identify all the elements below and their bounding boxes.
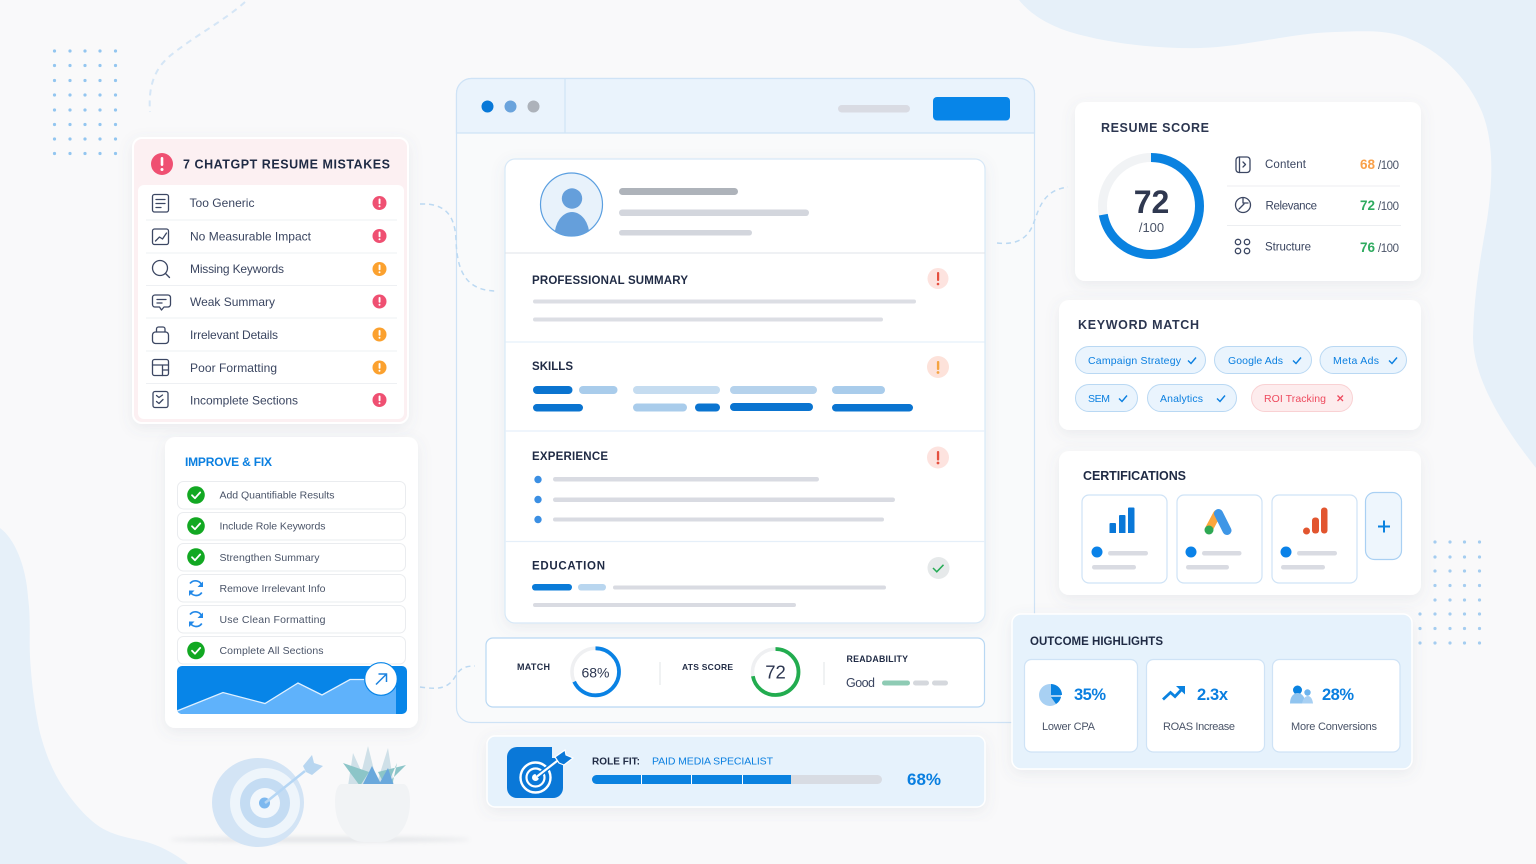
donut: 72/100 bbox=[1102, 158, 1200, 254]
chip: Google Ads: Google Ads bbox=[1228, 355, 1283, 367]
row: Weak Summary bbox=[152, 294, 386, 310]
metric: readability: READABILITY bbox=[846, 654, 908, 664]
metric: ATS score bbox=[682, 649, 798, 695]
row: Missing Keywords: Missing Keywords bbox=[190, 262, 284, 276]
dashed curve: top left bbox=[150, 2, 245, 112]
connector: resume to score panel bbox=[997, 187, 1068, 243]
row: Remove Irrelevant Info: Remove Irrelevant Info bbox=[220, 583, 326, 595]
section: skills: SKILLS bbox=[532, 361, 573, 373]
dot grid: lower right bbox=[1418, 540, 1481, 645]
heading: improve and fix: IMPROVE & FIX bbox=[185, 455, 272, 469]
row: structure bbox=[1235, 239, 1399, 255]
card: ROAS increase bbox=[1146, 660, 1264, 752]
row: Missing Keywords bbox=[152, 260, 386, 278]
chip: Campaign Strategy bbox=[1076, 346, 1206, 374]
panel: role fit: PAID MEDIA SPECIALIST bbox=[652, 756, 774, 768]
chip: Meta Ads: Meta Ads bbox=[1333, 355, 1379, 367]
row: content: /100 bbox=[1378, 160, 1399, 172]
dot grid: top left bbox=[53, 49, 117, 155]
row: relevance: Relevance bbox=[1266, 200, 1317, 212]
card: ROAS increase: 2.3x bbox=[1197, 686, 1229, 704]
panel: outcome highlights bbox=[1012, 614, 1412, 769]
heading: resume score: RESUME SCORE bbox=[1101, 121, 1209, 135]
row: No Measurable Impact bbox=[152, 229, 386, 244]
background blob: top right bbox=[1019, 0, 1536, 468]
chip: Google Ads bbox=[1214, 346, 1312, 374]
panel: match, ATS score, readability bbox=[486, 638, 984, 707]
row: Too Generic: Too Generic bbox=[190, 196, 254, 210]
row: content: 68 bbox=[1360, 157, 1375, 172]
row: Use Clean Formatting bbox=[178, 606, 406, 633]
section: education: EDUCATION bbox=[532, 560, 605, 572]
illustration: potted succulent bbox=[335, 746, 410, 842]
row: Include Role Keywords: Include Role Keywords bbox=[220, 520, 326, 532]
row: Poor Formatting bbox=[152, 360, 386, 376]
panel: certifications bbox=[1059, 451, 1421, 595]
row: Complete All Sections bbox=[178, 636, 406, 664]
metric: match: MATCH bbox=[517, 662, 550, 672]
section: professional summary bbox=[532, 268, 948, 322]
card: more conversions bbox=[1272, 660, 1400, 752]
card: analytics certificate bbox=[1082, 495, 1167, 583]
panel: resume document bbox=[505, 159, 985, 623]
metric: readability: Good bbox=[846, 676, 875, 690]
section: education bbox=[532, 557, 950, 607]
card: ROAS increase: ROAS Increase bbox=[1163, 721, 1235, 733]
browser window bbox=[456, 78, 1034, 722]
chip: Meta Ads bbox=[1320, 346, 1406, 374]
row: structure: /100 bbox=[1378, 243, 1399, 255]
icon: up-right arrow button bbox=[365, 663, 397, 695]
row: Weak Summary: Weak Summary bbox=[190, 295, 275, 309]
card: more conversions: 28% bbox=[1322, 686, 1354, 704]
chip: Analytics: Analytics bbox=[1160, 393, 1203, 405]
icon: target with arrow bbox=[507, 746, 573, 798]
heading: mistakes bbox=[151, 153, 390, 175]
panel: 7 ChatGPT resume mistakes bbox=[133, 138, 408, 423]
button: add certificate bbox=[1366, 492, 1402, 560]
row: Too Generic bbox=[152, 194, 386, 212]
panel: improve and fix bbox=[165, 437, 418, 728]
background blob: bottom left bbox=[0, 528, 188, 864]
row: structure: 76 bbox=[1360, 240, 1375, 255]
illustration: ground shadow bbox=[170, 837, 470, 842]
connector: improve panel to match panel bbox=[420, 666, 475, 688]
row: relevance bbox=[1236, 198, 1399, 213]
card: lower CPA: 35% bbox=[1074, 686, 1106, 704]
section: experience: EXPERIENCE bbox=[532, 451, 608, 463]
metric: match bbox=[517, 648, 619, 695]
row: relevance: /100 bbox=[1378, 201, 1399, 213]
row: Strengthen Summary: Strengthen Summary bbox=[220, 552, 320, 564]
row: Incomplete Sections bbox=[153, 392, 386, 408]
panel: role fit: ROLE FIT: bbox=[592, 756, 640, 768]
row: content bbox=[1236, 157, 1399, 172]
card: more conversions: More Conversions bbox=[1291, 721, 1378, 733]
chip: Campaign Strategy: Campaign Strategy bbox=[1088, 355, 1182, 367]
panel: resume score bbox=[1075, 102, 1421, 281]
chart: area trend bbox=[177, 666, 407, 714]
connector: mistakes panel to resume bbox=[420, 204, 497, 291]
row: Include Role Keywords bbox=[178, 512, 406, 540]
row: Strengthen Summary bbox=[178, 544, 406, 571]
heading: certifications: CERTIFICATIONS bbox=[1083, 469, 1186, 483]
row: Add Quantifiable Results: Add Quantifiable Results bbox=[220, 490, 334, 502]
card: red bars certificate bbox=[1272, 495, 1357, 583]
row: Complete All Sections: Complete All Sections bbox=[220, 645, 324, 657]
chip: ROI Tracking bbox=[1252, 384, 1352, 412]
section: skills bbox=[532, 356, 949, 412]
chip: Analytics bbox=[1148, 384, 1236, 412]
row: Remove Irrelevant Info bbox=[178, 574, 406, 602]
metric: ATS score: ATS SCORE bbox=[682, 662, 733, 672]
panel: role fit: 68% bbox=[907, 770, 941, 789]
heading: keyword match: KEYWORD MATCH bbox=[1078, 318, 1199, 332]
row: content: Content bbox=[1265, 159, 1307, 171]
card: Google Ads certificate bbox=[1177, 495, 1262, 583]
panel: keyword match bbox=[1059, 300, 1421, 430]
card: lower CPA: Lower CPA bbox=[1042, 721, 1096, 733]
row: structure: Structure bbox=[1265, 242, 1311, 254]
section: experience bbox=[532, 446, 949, 523]
row: Incomplete Sections: Incomplete Sections bbox=[190, 394, 298, 408]
row: relevance: 72 bbox=[1360, 198, 1375, 213]
row: Irrelevant Details bbox=[152, 327, 386, 344]
card: lower CPA bbox=[1024, 660, 1138, 752]
panel: role fit bbox=[487, 736, 985, 807]
heading: mistakes: 7 CHATGPT RESUME MISTAKES bbox=[183, 158, 390, 172]
metric: ATS score: 72 bbox=[765, 662, 786, 682]
illustration: target with arrow bbox=[212, 755, 323, 847]
heading: outcome highlights: OUTCOME HIGHLIGHTS bbox=[1030, 636, 1163, 648]
donut: 72/100: /100 bbox=[1139, 220, 1164, 235]
progress bar: 68% bbox=[592, 775, 882, 784]
metric: readability bbox=[846, 654, 948, 690]
chip: SEM: SEM bbox=[1088, 393, 1110, 405]
chip: ROI Tracking: ROI Tracking bbox=[1264, 393, 1326, 405]
donut: 72/100: 72 bbox=[1134, 184, 1169, 220]
chip: SEM bbox=[1076, 384, 1138, 412]
row: Poor Formatting: Poor Formatting bbox=[190, 361, 277, 375]
row: Use Clean Formatting: Use Clean Formatting bbox=[220, 614, 326, 626]
section: professional summary: PROFESSIONAL SUMMARY bbox=[532, 275, 688, 287]
row: Irrelevant Details: Irrelevant Details bbox=[190, 328, 278, 342]
metric: match: 68% bbox=[581, 664, 610, 680]
resume header with avatar bbox=[540, 172, 809, 237]
row: Add Quantifiable Results bbox=[178, 482, 406, 509]
row: No Measurable Impact: No Measurable Impact bbox=[190, 230, 312, 244]
